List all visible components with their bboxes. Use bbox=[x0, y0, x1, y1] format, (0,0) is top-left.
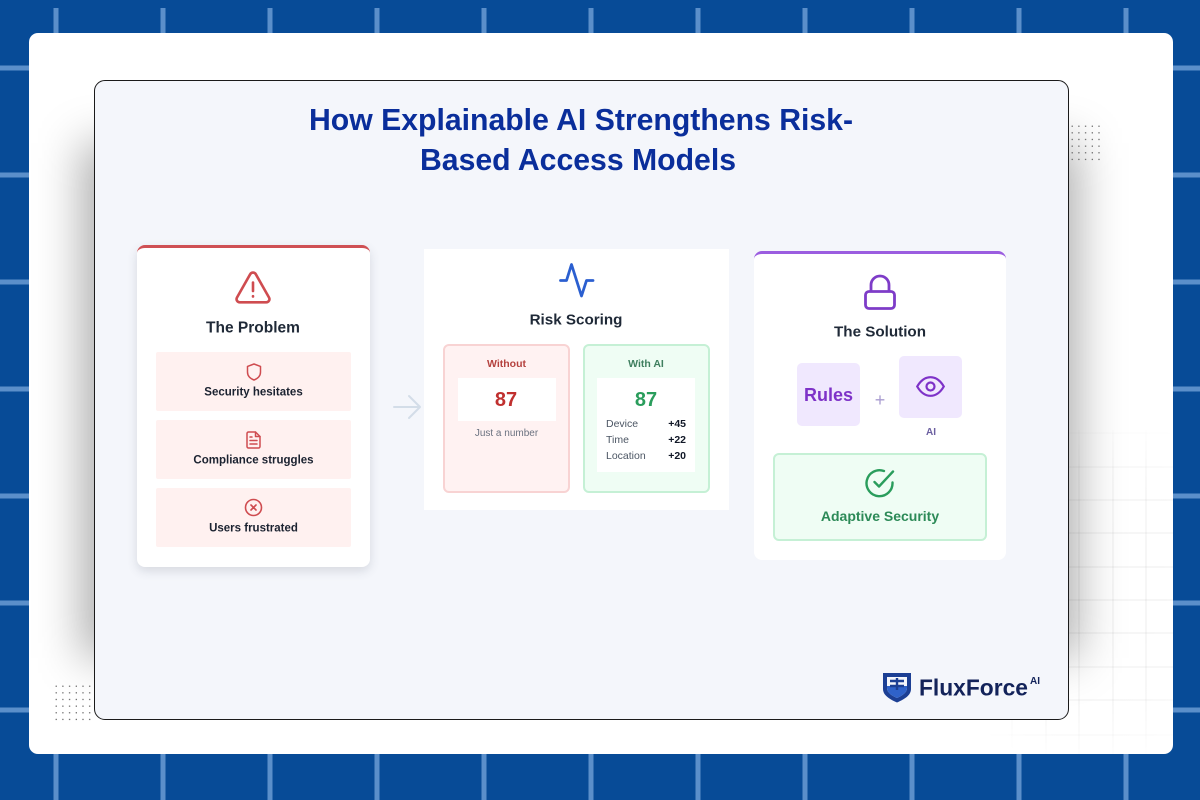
item: compliance struggles: Compliance struggles bbox=[193, 454, 314, 466]
box: with ai bbox=[583, 344, 710, 493]
plus: + bbox=[875, 390, 885, 410]
label: without: Without bbox=[487, 358, 526, 370]
heading: the problem: The Problem bbox=[206, 319, 300, 336]
box: rules bbox=[797, 363, 860, 426]
item: users frustrated bbox=[156, 488, 351, 547]
score breakdown: +20 bbox=[668, 450, 686, 462]
score: 87: 87 bbox=[495, 389, 517, 411]
superscript ai: AI bbox=[1030, 676, 1040, 687]
box: ai eye bbox=[899, 356, 962, 418]
box: without bbox=[443, 344, 570, 493]
title: How Explainable AI Strengthens Risk- bbox=[309, 104, 853, 137]
box: adaptive security bbox=[773, 453, 987, 541]
title: Based Access Models bbox=[420, 144, 736, 177]
arrow bbox=[393, 395, 421, 419]
wordmark: FluxForce bbox=[919, 675, 1028, 701]
dot pattern top right bbox=[1071, 125, 1100, 160]
item: users frustrated: Users frustrated bbox=[209, 522, 298, 534]
item: compliance struggles bbox=[156, 420, 351, 479]
item: security hesitates bbox=[156, 352, 351, 411]
score breakdown bbox=[597, 378, 695, 472]
icon: warning triangle bbox=[235, 271, 271, 304]
caption: Just a number bbox=[475, 428, 538, 439]
box: rules: Rules bbox=[804, 385, 853, 405]
label: ai: AI bbox=[926, 427, 936, 438]
item: security hesitates: Security hesitates bbox=[204, 386, 303, 398]
score breakdown: 87 bbox=[635, 389, 657, 411]
panel: risk scoring bbox=[424, 249, 729, 510]
label: with ai: With AI bbox=[628, 358, 664, 370]
logo: fluxforce bbox=[883, 673, 1040, 702]
icon: shield bbox=[883, 673, 911, 702]
score breakdown: Location bbox=[606, 450, 646, 462]
score: 87 bbox=[458, 378, 556, 421]
title bbox=[309, 104, 853, 177]
icon: pulse bbox=[559, 263, 594, 298]
panel: the solution bbox=[754, 251, 1006, 560]
heading: the solution: The Solution bbox=[834, 323, 926, 340]
dot pattern bottom left bbox=[55, 685, 90, 720]
icon: check circle bbox=[865, 469, 894, 498]
score breakdown: Time bbox=[606, 434, 629, 446]
label: adaptive security: Adaptive Security bbox=[821, 508, 939, 524]
main panel bbox=[94, 80, 1069, 720]
score breakdown: Device bbox=[606, 418, 638, 430]
panel: the problem bbox=[137, 245, 370, 567]
heading: risk scoring: Risk Scoring bbox=[530, 311, 622, 328]
icon: lock bbox=[864, 274, 896, 310]
score breakdown: +45 bbox=[668, 418, 686, 430]
panel shadow bbox=[82, 143, 1078, 658]
score breakdown: +22 bbox=[668, 434, 686, 446]
